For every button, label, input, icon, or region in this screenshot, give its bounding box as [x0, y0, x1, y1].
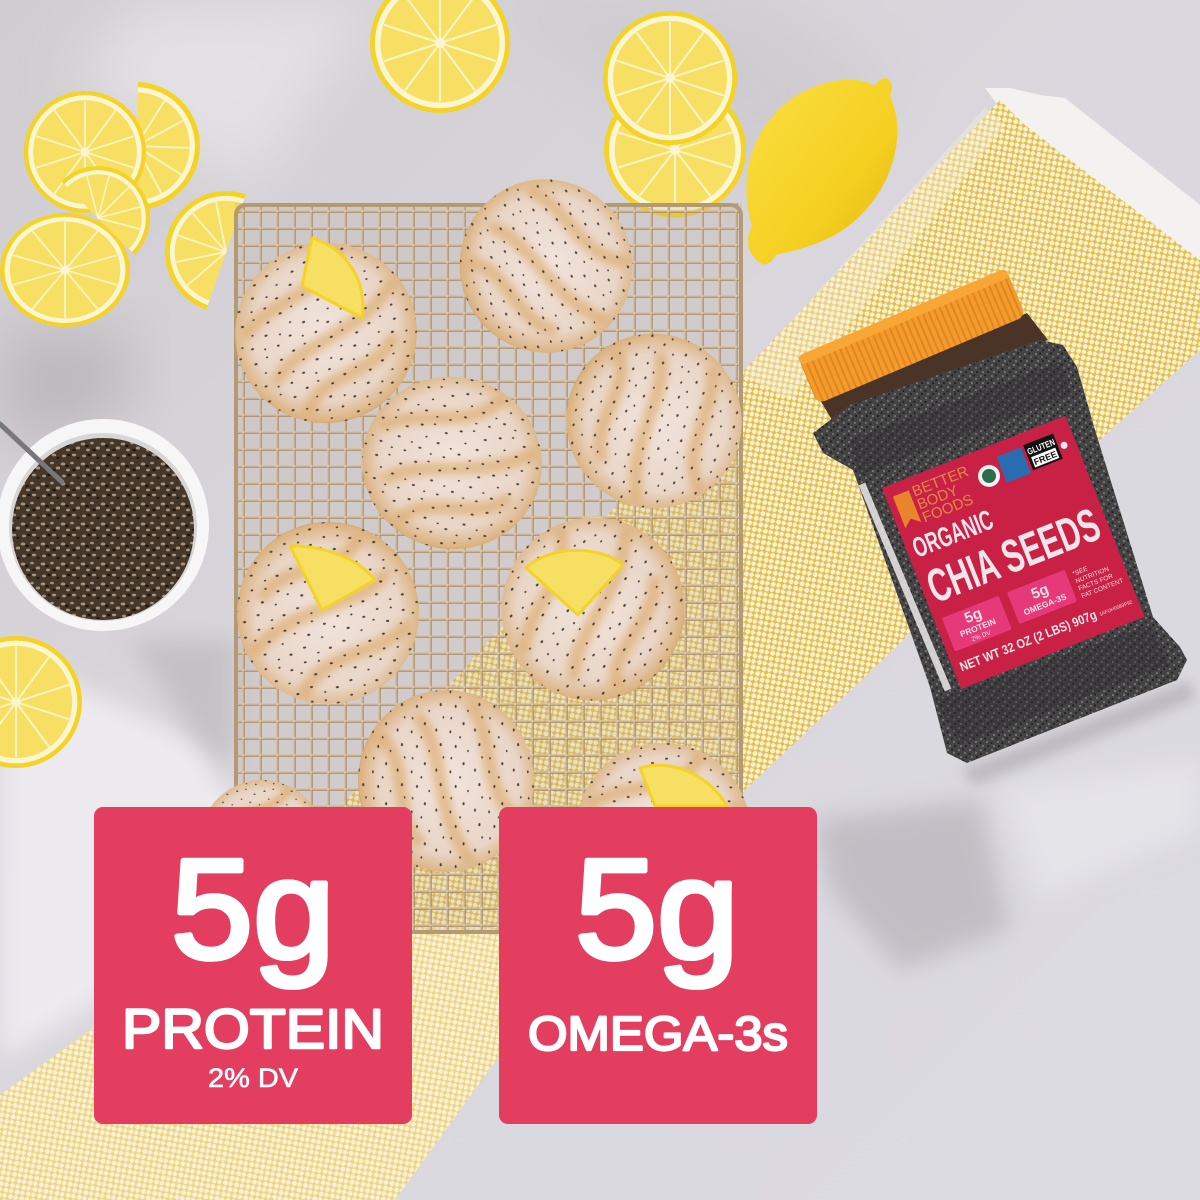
chia seeds jar: [797, 268, 1195, 785]
product code: 1AFOH0089P92: [1099, 599, 1134, 618]
lemon slice lower: [604, 82, 746, 218]
lemon wedge on muffin 5: [290, 546, 375, 610]
jar highlight: [862, 484, 948, 690]
lemon wedge on muffin 6: [526, 550, 623, 615]
omega-3 amount: 5g: [575, 830, 739, 989]
brand name: [910, 463, 981, 526]
brand name: BODY: [915, 482, 961, 513]
omega badge: OMEGA-3S: [1022, 591, 1068, 617]
product name: CHIA SEEDS: [919, 497, 1107, 613]
jar frame ridge: [850, 362, 1170, 745]
muffin 1: [210, 217, 442, 449]
jar body: [813, 340, 1187, 763]
whole lemon: [746, 78, 897, 264]
omega badge: [1007, 570, 1077, 624]
lemon slice: [24, 91, 146, 213]
lemons top centre: [370, 0, 746, 218]
lemon half slice: [134, 82, 202, 212]
muffin 2: [428, 148, 664, 384]
protein amount: 5g: [171, 830, 335, 989]
brand name: FOODS: [920, 491, 976, 526]
certification badges: GLUTEN: [1026, 437, 1056, 457]
brand name: BETTER: [910, 463, 971, 500]
protein label: PROTEIN: [122, 997, 384, 1060]
muffin 3: [534, 302, 774, 540]
panel: omega-3s: [499, 807, 817, 1124]
jar lid: [797, 268, 1026, 404]
lemon half slice: [148, 174, 246, 310]
lemon slice upper: [603, 11, 737, 145]
omega badge: 5g: [1029, 581, 1051, 603]
lemon half slice: [61, 144, 172, 255]
omega-3 label: OMEGA-3s: [528, 1008, 788, 1061]
daily value: 2% DV: [208, 1063, 298, 1093]
certification badges: FREE: [1032, 449, 1058, 467]
muffins: [200, 148, 774, 917]
muffin 8: [576, 743, 750, 917]
spoon: [0, 424, 62, 482]
protein badge: 5g: [962, 605, 985, 627]
chia seeds: [12, 438, 194, 620]
lemon half lower left: [0, 636, 82, 768]
protein badge: [942, 596, 1012, 652]
muffin 5: [223, 508, 433, 718]
fat content note: [1072, 555, 1125, 600]
product label: [882, 416, 1144, 689]
product name: ORGANIC: [908, 504, 997, 564]
protein badge: 2% DV: [971, 629, 993, 643]
cooling rack: [235, 203, 742, 933]
lemon slice: [0, 213, 130, 327]
net weight: NET WT 32 OZ (2 LBS) 907g: [957, 607, 1099, 674]
brand logo: [893, 490, 921, 528]
lemon cluster top left: [0, 82, 246, 327]
muffin 6: [464, 480, 722, 738]
certification badges: [973, 430, 1072, 492]
fat content note: NUTRITION: [1075, 566, 1110, 585]
muffin 9: [200, 780, 324, 904]
fat content note: FAT CONTENT: [1081, 577, 1125, 600]
jar neck: [820, 313, 1048, 425]
muffin 7: [358, 690, 534, 872]
protein badge: PROTEIN: [958, 616, 997, 639]
product name: [908, 468, 1107, 613]
fat content note: FACTS FOR: [1078, 573, 1114, 593]
panel: protein: [94, 807, 412, 1124]
lemon wedge on muffin 8: [640, 765, 727, 806]
jar shadow: [960, 680, 1195, 785]
muffin 4: [348, 363, 556, 563]
lemon half: [370, 0, 510, 113]
lemon wedge on muffin 1: [302, 238, 363, 318]
fat content note: *SEE: [1072, 565, 1089, 578]
bowl of chia seeds: [0, 419, 209, 631]
